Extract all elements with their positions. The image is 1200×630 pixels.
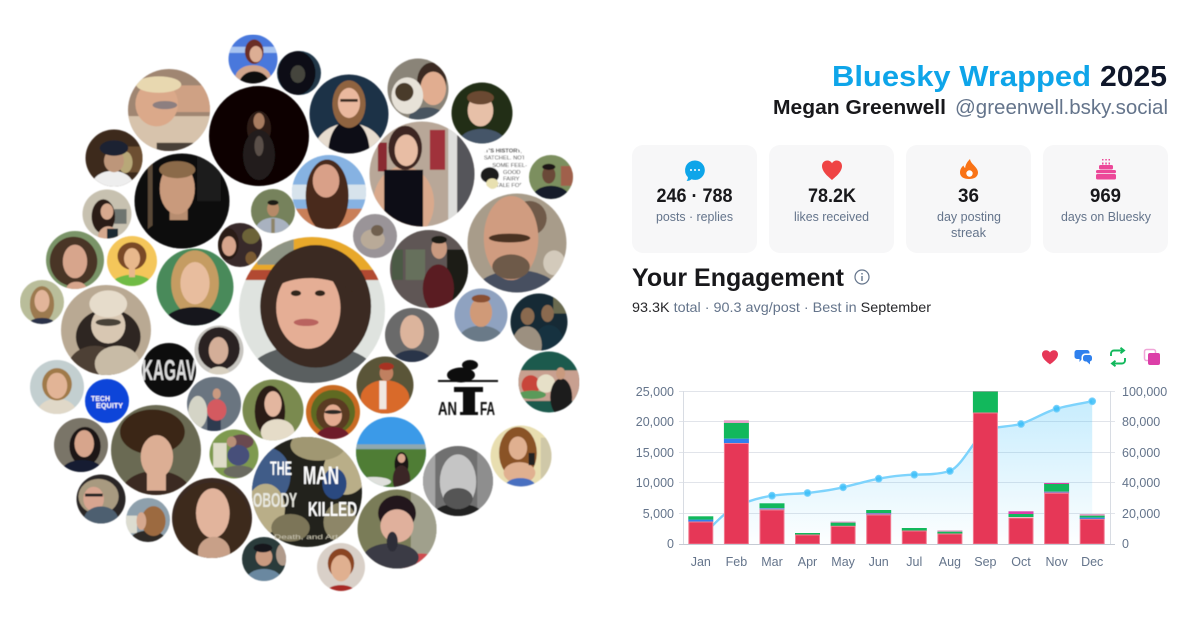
avatar: woman in varsity jacket: [308, 74, 390, 154]
stacked bars: [688, 391, 1105, 544]
avatar: smiling man: [454, 288, 508, 342]
avatar: film poster The Man Nobody Killed: OBODY: [253, 490, 297, 512]
left axis labels: 20,000: [636, 415, 674, 429]
avatar: woman with long curly hair: [172, 478, 252, 567]
right axis labels: [1122, 385, 1167, 551]
stat label: streak: [951, 225, 986, 240]
avatar: red-haired boy: [317, 543, 365, 597]
avatar: woman with short curly hair: [111, 405, 201, 518]
month labels: Aug: [939, 555, 961, 569]
icon: chat bubble: [685, 160, 705, 181]
chart legend: [1042, 348, 1160, 366]
left axis labels: 0: [667, 537, 674, 551]
month labels: Feb: [726, 555, 747, 569]
avatar: man in dark tee: [528, 154, 574, 200]
avatar: Kagavi logo: [142, 343, 196, 397]
icon: info: [855, 270, 869, 284]
avatar: blonde woman: [156, 248, 234, 326]
avatar: comic panel: [480, 148, 527, 190]
panel: avatar bubble cluster: [20, 34, 580, 597]
avatar: small bird: [353, 214, 397, 258]
stat label: posts · replies: [656, 209, 733, 224]
chart: monthly engagement bars with cumulative line: [636, 385, 1167, 569]
month labels: Jul: [906, 555, 922, 569]
avatar: man in black shirt: [134, 152, 230, 250]
user name and handle: [773, 97, 1168, 119]
stat value: 36: [958, 186, 979, 207]
panel: posting streak stat: [906, 145, 1031, 253]
avatar: man before mural: [518, 352, 580, 416]
avatar: dark fur hood: [277, 51, 321, 95]
avatar: short-haired person in denim: [242, 537, 289, 591]
engagement summary: 93.3K total · 90.3 avg/post · Best in September: [632, 299, 931, 315]
icon: birthday cake: [1096, 159, 1116, 180]
avatar: bearded man in black and white: [422, 445, 494, 517]
avatar: young woman under sky: [292, 155, 366, 232]
stat value: 246 · 788: [656, 186, 732, 207]
heading: Your Engagement: Your Engagement: [632, 264, 845, 292]
avatar: man taking mirror selfie: [390, 230, 468, 313]
icon: legend reposts: [1111, 348, 1125, 366]
avatar: woman with dark hair: [54, 418, 108, 484]
month labels: [691, 555, 1103, 569]
panel: days on Bluesky stat: [1043, 145, 1168, 253]
avatar: illustrated woman in autumn wreath: [306, 385, 360, 448]
month labels: Jan: [691, 555, 711, 569]
avatar: illustrated woman: [106, 235, 158, 287]
avatar: woman in park with skyline: [356, 417, 426, 493]
avatar: large selfie of woman with bangs: [238, 236, 386, 384]
avatar: film poster The Man Nobody Killed: [251, 436, 363, 548]
stat label: days on Bluesky: [1061, 209, 1151, 224]
avatar: film poster The Man Nobody Killed: KILLED: [308, 499, 357, 521]
left axis labels: 5,000: [643, 507, 674, 521]
avatar: woman with curls and bindi: [194, 326, 244, 381]
cumulative area and line: [701, 398, 1096, 544]
right axis labels: 0: [1122, 537, 1129, 551]
title: 2025: [1100, 61, 1167, 93]
avatar: film poster The Man Nobody Killed: MAN: [303, 462, 339, 490]
month labels: Oct: [1011, 555, 1031, 569]
right axis labels: 100,000: [1122, 385, 1167, 399]
avatar: man in baseball cap: [84, 128, 144, 187]
avatar: woman with dark dog: [356, 488, 438, 570]
logo: antifa bear on pool cue: AN: [438, 399, 457, 419]
month labels: Sep: [974, 555, 997, 569]
avatar: woman on blue: [228, 34, 278, 84]
left axis labels: 10,000: [636, 476, 674, 490]
avatar: man sitting with dog: [210, 430, 258, 478]
avatar: two men: [510, 292, 568, 352]
icon: legend heart: [1042, 350, 1058, 364]
stat label: day posting: [937, 209, 1001, 224]
avatar: woman in darkness: [209, 86, 309, 186]
right axis labels: 40,000: [1122, 476, 1160, 490]
avatar: Tech Equity logo: EQUITY: [96, 401, 123, 410]
avatar: woman with long dark hair: [242, 380, 304, 445]
right axis labels: 60,000: [1122, 446, 1160, 460]
icon: legend quotes: [1144, 350, 1160, 365]
avatar: film poster The Man Nobody Killed: Death, and Art: [274, 535, 339, 541]
stat label: likes received: [794, 209, 869, 224]
title: Bluesky Wrapped: [832, 61, 1091, 93]
stat value: 78.2K: [808, 186, 856, 207]
avatar: woman in profile: [126, 498, 170, 549]
avatar: man in orange jumpsuit: [356, 356, 414, 415]
avatar: bald man smiling: [384, 307, 440, 363]
avatar: man in pink shirt: [187, 377, 241, 431]
left axis labels: [636, 385, 674, 551]
avatar: Tech Equity logo: TECH: [91, 394, 110, 403]
avatar: woman with long hair: [20, 280, 64, 330]
avatar: Tech Equity logo: [85, 379, 129, 423]
avatar: woman with dog: [388, 58, 448, 129]
month labels: Mar: [761, 555, 783, 569]
left axis labels: 25,000: [636, 385, 674, 399]
right axis labels: 20,000: [1122, 507, 1160, 521]
user name and handle: Megan Greenwell: [773, 97, 946, 119]
right axis labels: 80,000: [1122, 415, 1160, 429]
avatar: Kagavi logo: KAGAV: [142, 355, 196, 387]
icon: heart: [822, 160, 842, 180]
left axis labels: 15,000: [636, 446, 674, 460]
avatar: woman with dark hair: [82, 189, 132, 240]
avatar: man in grey suit: [250, 188, 296, 234]
stat label: [937, 209, 1001, 240]
avatar: young man in denim: [450, 82, 514, 144]
month labels: Nov: [1045, 555, 1068, 569]
month labels: Apr: [798, 555, 817, 569]
panel: likes stat: [769, 145, 894, 253]
avatar: older man with glasses: [128, 69, 210, 155]
logo: antifa bear on pool cue: FA: [480, 399, 495, 419]
avatar: sepia woman in hat: [60, 284, 152, 376]
icon: flame: [960, 159, 978, 179]
logo: antifa bear on pool cue: [438, 360, 498, 419]
avatar: woman in black tank top: [370, 122, 474, 240]
avatar: woman with red hair in mirror: [490, 426, 552, 495]
panel: posts and replies stat: [632, 145, 757, 253]
avatar: woman with glasses and grey hair: [76, 474, 126, 533]
icon: legend replies: [1074, 350, 1092, 364]
avatar: woman with curly hair: [46, 231, 104, 296]
month labels: May: [831, 555, 856, 569]
user name and handle: @greenwell.bsky.social: [955, 97, 1168, 119]
stat value: 969: [1090, 186, 1121, 207]
avatar: smiling woman in stripes: [30, 360, 84, 414]
month labels: Jun: [869, 555, 889, 569]
month labels: Dec: [1081, 555, 1103, 569]
avatar: film poster The Man Nobody Killed: THE: [270, 459, 292, 480]
avatar: woman with microphone: [217, 223, 262, 267]
avatar: bald man with glasses: [466, 192, 568, 294]
